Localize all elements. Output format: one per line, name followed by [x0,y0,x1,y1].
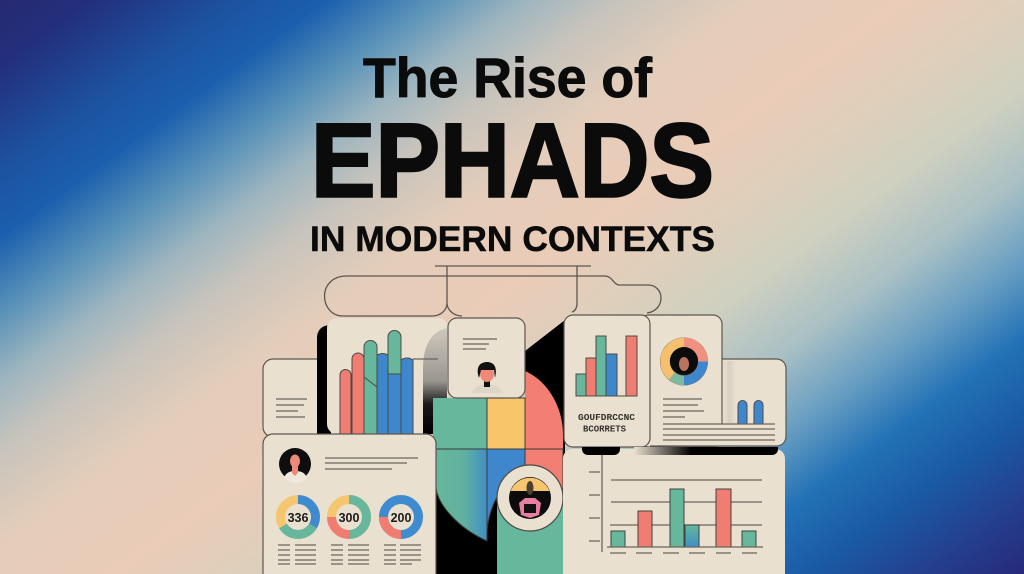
panel: small pill chart card [650,359,786,446]
donut 1 [280,500,316,534]
note lines [276,399,307,417]
donut values: 200 [391,511,411,525]
icon: avatar [279,448,311,483]
yellow tile [487,398,525,449]
donut values: 300 [339,511,359,525]
icon: round portrait badge [497,465,563,531]
grid lines [610,480,762,525]
green tile [433,398,487,449]
bars [340,331,413,434]
title line: The Rise of: The Rise of [363,46,652,109]
panel: conference bar chart card: BCORRETS [583,424,626,434]
lower green block [497,498,564,574]
column bars [611,489,756,547]
green to blue quarter [436,449,487,541]
card text lines [463,339,497,349]
blue pills [738,400,747,424]
lower salmon tile [525,449,563,490]
connector outline bubbles [324,266,661,316]
caption: GOUFDRCCNC [578,412,635,423]
panel: rounded bar chart [327,318,448,434]
chart line [413,358,438,360]
colour quilt [433,371,564,574]
donut 2 [332,500,366,534]
gradient shadow [423,328,447,434]
icon: avatar ring [660,338,708,386]
icon: person [472,362,503,393]
title [310,46,715,259]
baseline and labels [607,547,763,553]
title line: EPHADS: EPHADS [311,102,714,220]
salmon sweep [525,371,563,488]
panel: donut stats card [263,434,436,574]
title line: in modern contexts: IN MODERN CONTEXTS [310,220,715,259]
donut 3 [384,500,418,534]
panel: bottom column chart [563,447,785,574]
report lines [663,399,775,440]
black backing shapes [436,320,565,574]
blue tile [487,449,525,535]
panel: conference bar chart card [564,315,650,447]
bars [576,336,637,396]
header lines [325,458,418,469]
donut values [288,511,411,525]
axis and ticks [589,455,602,552]
panel: small left note [263,325,343,437]
panel: report with avatar ring [640,315,722,447]
donut values: 336 [288,511,308,525]
panel: person card [448,318,525,398]
black side strip [317,325,331,437]
small legend lines [278,545,421,564]
